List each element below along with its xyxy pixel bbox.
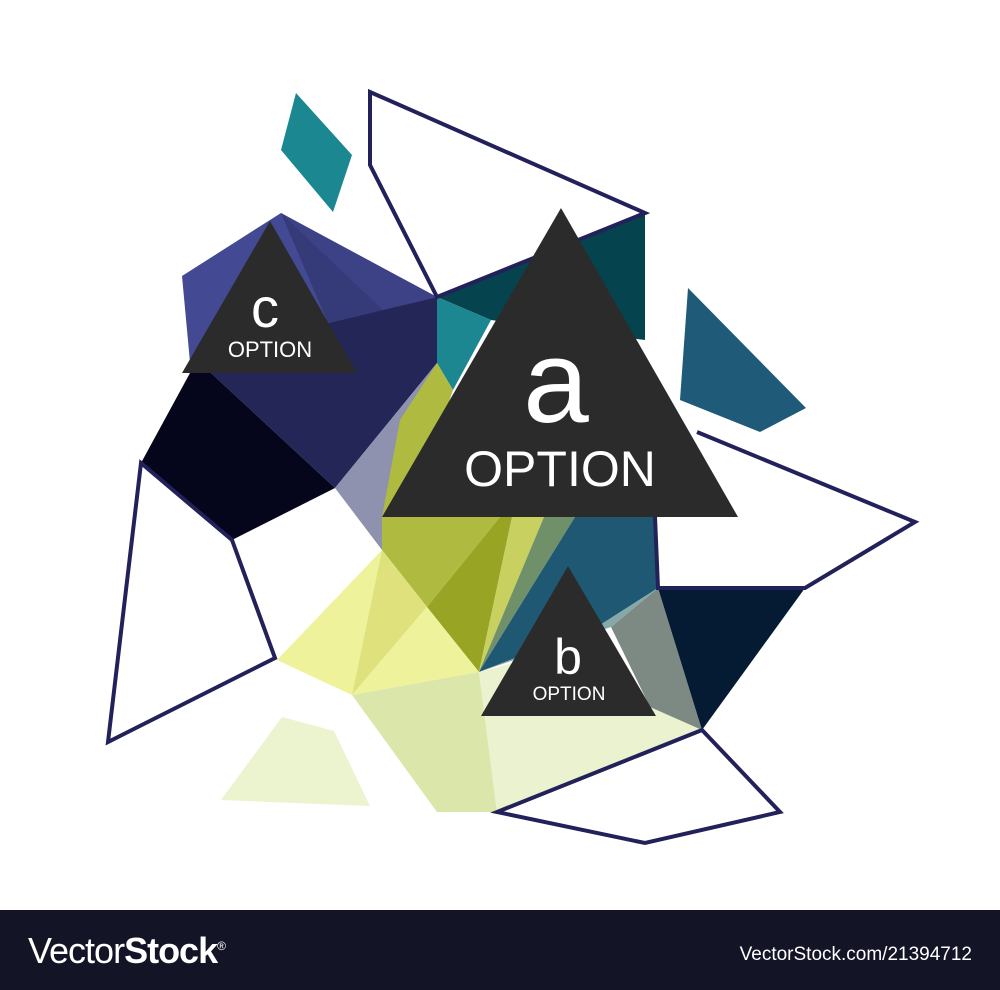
cluster: blue left: [141, 213, 437, 550]
footer url: VectorStock.com/21394712: [740, 944, 972, 965]
shape: pale quad bottom left: [221, 717, 370, 806]
triangle c: [182, 221, 357, 373]
triangle a: OPTION: [464, 441, 656, 497]
cluster: teal upper: [382, 213, 645, 517]
triangle b: OPTION: [533, 684, 605, 705]
shape: teal rhombus: [281, 93, 352, 212]
footer bar: [0, 910, 1000, 990]
footer logo: VectorStock®: [28, 930, 225, 971]
cluster: yellow-green lower: [277, 517, 805, 812]
triangle c: c: [251, 276, 279, 339]
triangle a: a: [523, 316, 589, 448]
shape: right blue quad: [680, 288, 806, 432]
triangle b: b: [554, 629, 582, 685]
outlines: navy strokes: [108, 92, 915, 843]
triangle c: OPTION: [228, 337, 312, 362]
triangle b: [481, 566, 656, 716]
triangle a: [382, 208, 738, 517]
